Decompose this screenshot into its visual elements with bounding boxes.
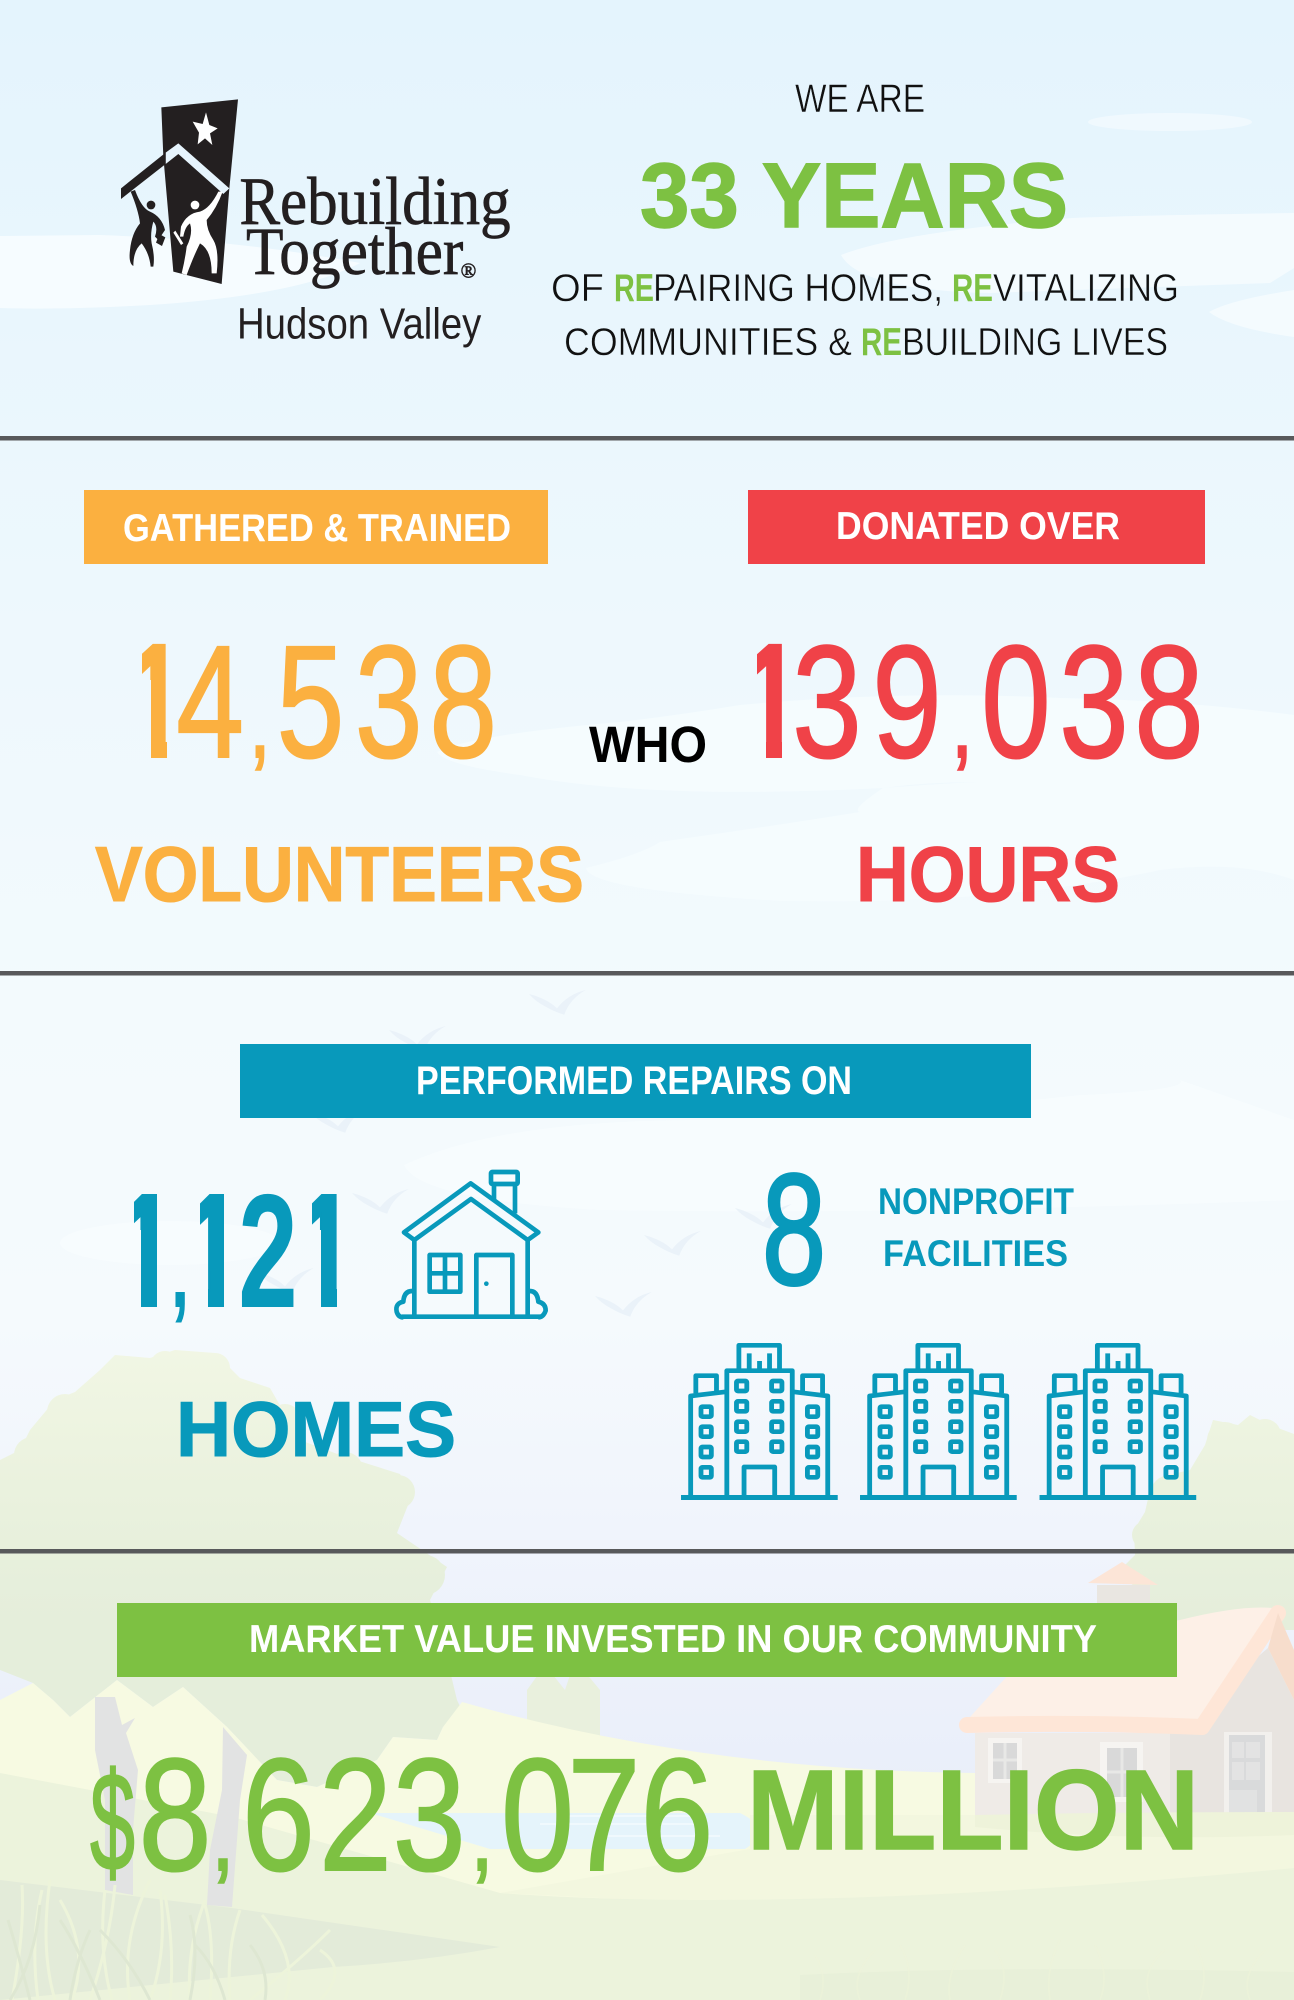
logo wordmark: ®	[461, 260, 476, 282]
tagline line 2: COMMUNITIES &	[564, 321, 852, 364]
volunteer count: 4	[176, 613, 244, 792]
volunteer count: 1	[122, 613, 190, 792]
homes count: 1	[184, 1162, 244, 1342]
logo figure: carpenter	[173, 192, 223, 275]
logo wordmark: Hudson Valley	[237, 299, 481, 348]
hours label: HOURS	[856, 830, 1120, 918]
logo banner with star and roof	[121, 99, 238, 284]
we are: WE ARE	[795, 77, 925, 121]
tagline line 1: PAIRING HOMES,	[653, 267, 943, 310]
icon: building 3	[1040, 1345, 1196, 1500]
market value amount: $	[90, 1743, 135, 1900]
tagline line 1: OF	[551, 267, 604, 310]
market value amount: 8	[139, 1727, 212, 1905]
logo figure: painter	[130, 190, 165, 267]
hours count: 39	[792, 613, 942, 792]
market value amount	[90, 1727, 713, 1905]
homes count	[134, 1194, 337, 1322]
who connector: WHO	[589, 716, 707, 773]
volunteer count	[142, 644, 492, 771]
volunteer count: ,	[249, 667, 270, 778]
panel: repairs	[116, 1044, 1196, 1500]
logo wordmark	[237, 163, 511, 348]
divider lines	[0, 436, 1294, 1554]
market value amount: 623	[242, 1727, 466, 1905]
red banner	[748, 490, 1205, 564]
logo wordmark: Together	[246, 213, 464, 289]
icon: building 2	[860, 1345, 1017, 1500]
hours count: 038	[981, 613, 1204, 792]
homes count: ,	[171, 1216, 189, 1328]
tagline line 2: RE	[861, 321, 902, 364]
homes count: 1	[296, 1162, 355, 1342]
tagline line 2: BUILDING LIVES	[902, 321, 1168, 364]
33 years: 33 YEARS	[640, 145, 1068, 247]
tagline line 1: RE	[614, 267, 654, 310]
homes count: 1	[116, 1162, 176, 1342]
blue banner	[240, 1044, 1031, 1118]
icon: building 1	[681, 1345, 838, 1500]
homes label: HOMES	[176, 1385, 456, 1473]
tagline line 1: RE	[952, 267, 993, 310]
blue banner: PERFORMED REPAIRS ON	[416, 1059, 852, 1103]
panel: hours	[737, 490, 1205, 918]
facilities count: 8	[762, 1142, 826, 1318]
homes count: 2	[238, 1162, 298, 1342]
tagline line 1: VITALIZING	[993, 267, 1179, 310]
icon: house	[396, 1172, 546, 1317]
market value amount: 076	[501, 1727, 713, 1905]
tagline line 1	[551, 267, 1179, 310]
logo wordmark: Rebuilding	[239, 163, 511, 239]
million label: MILLION	[747, 1747, 1199, 1873]
volunteers label: VOLUNTEERS	[95, 830, 584, 918]
panel: volunteers	[84, 490, 584, 918]
volunteer count: 538	[277, 613, 497, 792]
hours count	[757, 644, 1199, 771]
logo: Rebuilding Together Hudson Valley	[121, 99, 511, 348]
orange banner: GATHERED & TRAINED	[123, 507, 511, 550]
nonprofit label: NONPROFIT	[878, 1181, 1074, 1222]
hours count: ,	[951, 668, 973, 779]
red banner: DONATED OVER	[836, 505, 1120, 548]
header text block	[551, 77, 1179, 364]
green banner: MARKET VALUE INVESTED IN OUR COMMUNITY	[249, 1618, 1097, 1661]
market value amount: ,	[212, 1780, 234, 1892]
hours count: 1	[737, 613, 807, 792]
market value amount: ,	[471, 1780, 493, 1892]
tagline line 2	[564, 321, 1168, 364]
green banner	[117, 1603, 1177, 1677]
panel: market value	[90, 1603, 1199, 1905]
facilities label: FACILITIES	[883, 1233, 1068, 1274]
orange banner	[84, 490, 548, 564]
